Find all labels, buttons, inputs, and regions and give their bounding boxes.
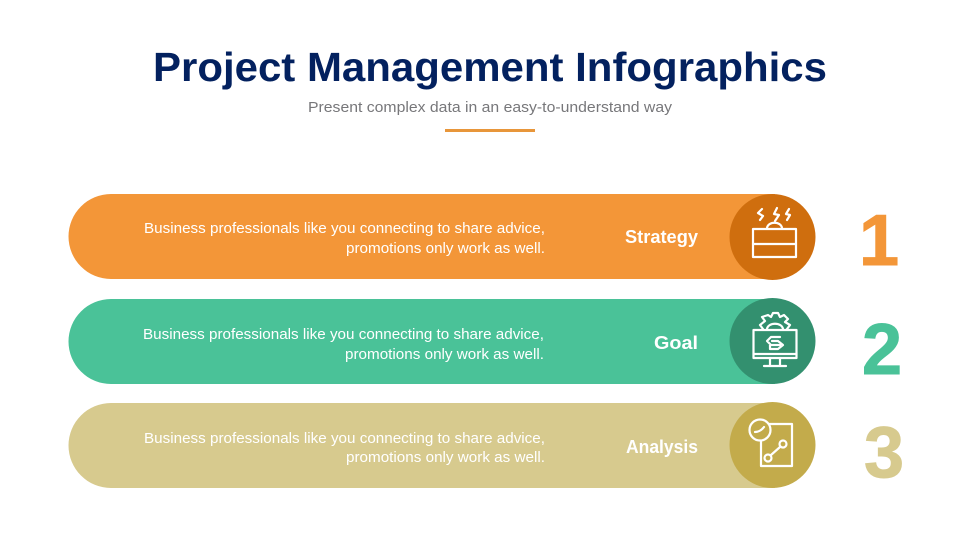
strategy label: Strategy [625,226,699,247]
number 3: 3 [864,413,904,493]
goal description: Business professionals like you connecting to share advice, [143,327,544,343]
goal description: promotions only work as well. [345,347,544,363]
icon: briefcase with lightning bolts [753,208,796,257]
title underline [445,129,535,132]
icon: document with clock and chart [750,420,792,466]
strategy description: Business professionals like you connecting to share advice, [144,221,545,237]
number 2: 2 [862,310,902,390]
strategy icon circle [730,194,816,280]
panel: analysis [68,402,816,488]
title: Project Management Infographics [153,44,827,90]
analysis label: Analysis [626,436,698,457]
goal label: Goal [654,332,698,353]
goal icon circle [730,298,816,384]
strategy bar [68,194,775,279]
analysis description: promotions only work as well. [346,450,545,466]
panel: strategy [68,194,816,280]
number 1: 1 [859,201,899,281]
analysis bar [68,403,775,488]
strategy description: promotions only work as well. [346,241,545,257]
icon: monitor with gear [754,313,796,366]
subtitle: Present complex data in an easy-to-understand way [308,99,673,116]
analysis icon circle [730,402,816,488]
analysis description: Business professionals like you connecting to share advice, [144,431,545,447]
goal bar [68,299,775,384]
panel: goal [68,298,816,384]
